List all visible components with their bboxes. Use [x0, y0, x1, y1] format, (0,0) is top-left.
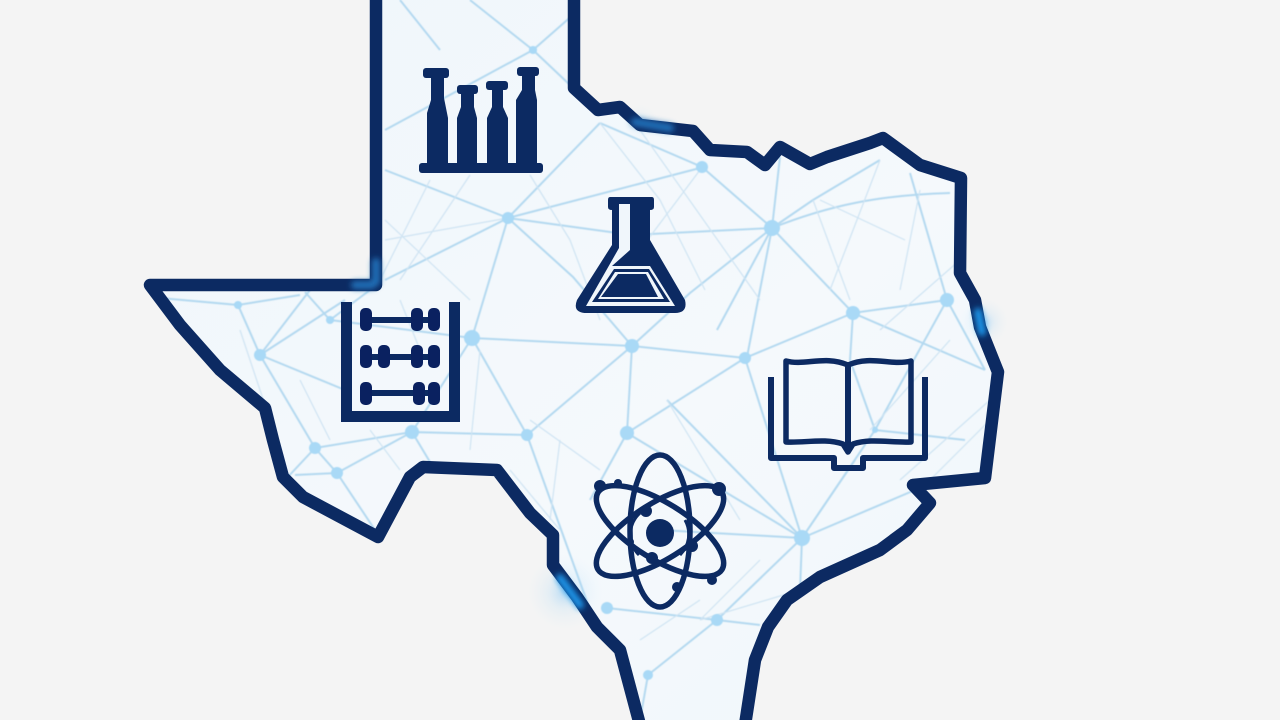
network lines — [160, 0, 990, 720]
icon: open book — [771, 361, 925, 468]
network nodes — [234, 46, 954, 680]
icon: atom — [583, 455, 737, 607]
glow highlights on border — [527, 104, 1008, 630]
outline bright highlights — [355, 122, 982, 605]
icon: abacus — [341, 302, 460, 422]
infographic: Texas map with STEM icons — [144, 0, 1004, 720]
map: Texas shape fill — [150, 0, 998, 720]
map: Texas outline — [150, 0, 998, 720]
icon: bottles row — [419, 67, 543, 173]
icon: flask — [576, 197, 686, 313]
